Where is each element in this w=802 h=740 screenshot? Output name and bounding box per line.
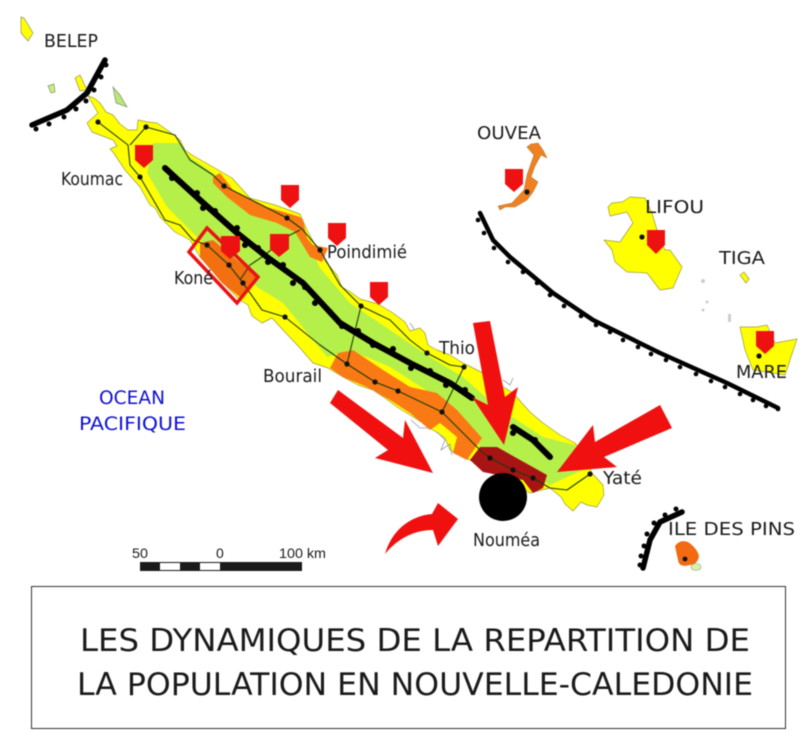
islet: Ile des Pins xyxy=(691,564,701,570)
central mountain range xyxy=(165,168,550,457)
ocean label xyxy=(79,387,186,435)
east coast road xyxy=(130,127,464,367)
place labels: Thio xyxy=(438,338,475,359)
main island: Grande Terre xyxy=(87,96,604,511)
title box: LA POPULATION EN NOUVELLE-CALEDONIE xyxy=(77,667,753,703)
lagoon reef outlines xyxy=(410,323,513,455)
Noumea black circle xyxy=(479,473,527,521)
place labels: Koné xyxy=(174,268,213,289)
island: Ile des Pins xyxy=(675,541,699,566)
place labels: TIGA xyxy=(718,248,766,269)
fault line: east xyxy=(476,213,780,411)
place labels: ILE DES PINS xyxy=(668,519,795,540)
loyalty islands xyxy=(498,143,797,570)
islets: Tiga channel xyxy=(701,279,731,322)
scale bar: 0 xyxy=(216,545,224,561)
shield markers xyxy=(135,145,774,354)
arrow: curved toward Noumea xyxy=(385,503,458,554)
place labels: Bourail xyxy=(263,366,322,387)
island: Ouvea xyxy=(498,143,547,210)
link: Houailou to Bourail xyxy=(347,306,361,364)
island: Tiga xyxy=(740,272,749,283)
place labels: Nouméa xyxy=(473,530,540,551)
place labels: MARE xyxy=(736,362,787,383)
title box xyxy=(32,586,786,728)
link: Kone to Poindimie xyxy=(240,230,300,280)
scale bar xyxy=(132,545,326,571)
transverse road links xyxy=(240,230,464,412)
place labels: Poindimié xyxy=(327,242,407,263)
ocean label: OCEAN xyxy=(99,387,165,409)
place labels: OUVEA xyxy=(477,123,542,144)
towns xyxy=(95,119,593,481)
green inland zone xyxy=(147,143,583,485)
island: north islet xyxy=(75,75,87,91)
fault line: Ile des Pins xyxy=(638,506,682,568)
arrow: from the east xyxy=(557,405,672,472)
title box: LES DYNAMIQUES DE LA REPARTITION DE xyxy=(80,623,750,659)
island: Belep xyxy=(21,17,33,41)
small islands in the north xyxy=(21,17,127,107)
ocean label: PACIFIQUE xyxy=(79,413,186,435)
place labels xyxy=(44,31,795,551)
orange zone: north-east coast xyxy=(213,173,328,262)
place labels: BELEP xyxy=(44,31,98,52)
place labels: Yaté xyxy=(602,468,642,489)
island: Lifou xyxy=(604,197,682,290)
arrow: from the north xyxy=(472,321,518,445)
scale bar: 100 km xyxy=(279,545,326,561)
west coast road xyxy=(98,122,590,490)
scale bar: 50 xyxy=(132,545,148,561)
orange zone: south-west coast xyxy=(330,350,482,460)
fault line: north-west xyxy=(32,60,108,132)
place labels: Koumac xyxy=(61,169,123,190)
island: Mare xyxy=(740,325,797,375)
island: green islet east xyxy=(113,87,127,107)
red frame: Kone zone xyxy=(189,228,258,303)
link: Thio to south coast xyxy=(442,367,464,412)
island: green islet west xyxy=(48,84,55,93)
place labels: LIFOU xyxy=(645,197,704,218)
roads xyxy=(98,122,590,490)
yellow coastal zone xyxy=(87,96,604,511)
arrow: from the west xyxy=(330,390,433,473)
dark red zone: Noumea xyxy=(470,447,547,493)
orange zone: Kone xyxy=(200,240,257,297)
